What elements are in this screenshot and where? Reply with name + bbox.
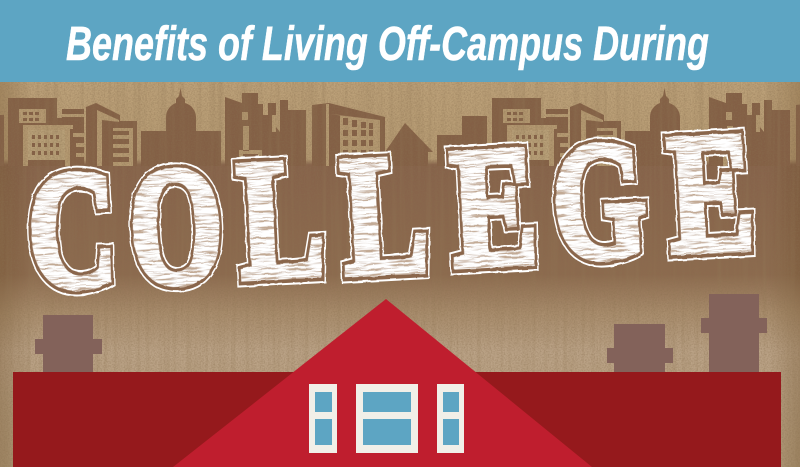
city skyline left block — [8, 88, 385, 166]
house — [13, 294, 781, 467]
letter O: O — [126, 131, 226, 320]
letter E: E — [447, 110, 541, 304]
letter E: E — [447, 110, 541, 304]
window centre — [356, 384, 418, 453]
letter G: G — [548, 105, 651, 296]
letter O: O — [126, 131, 226, 320]
letter C: C — [24, 135, 120, 324]
letter L: L — [234, 122, 328, 316]
letter L: L — [338, 118, 432, 312]
letter E: E — [664, 96, 758, 290]
skyline — [0, 88, 800, 166]
window right — [437, 384, 464, 453]
chimney centre right — [607, 324, 673, 372]
letter C: C — [24, 135, 120, 324]
letter G: G — [548, 105, 651, 296]
letter C: C — [24, 135, 120, 324]
chimney far right — [701, 294, 767, 372]
heading: COLLEGE — [24, 96, 758, 324]
letter E: E — [664, 96, 758, 290]
letter O: O — [126, 131, 226, 320]
letter L: L — [234, 122, 328, 316]
chimney left — [35, 315, 102, 372]
letter L: L — [338, 118, 432, 312]
letter E: E — [664, 96, 758, 290]
roof — [13, 372, 781, 467]
gable — [173, 299, 592, 467]
title banner — [0, 0, 800, 82]
letter L: L — [338, 118, 432, 312]
letter G: G — [548, 105, 651, 296]
skyline centre buildings — [0, 115, 800, 166]
letter E: E — [447, 110, 541, 304]
window left — [309, 384, 337, 453]
letter L: L — [234, 122, 328, 316]
city skyline right block — [492, 88, 800, 166]
